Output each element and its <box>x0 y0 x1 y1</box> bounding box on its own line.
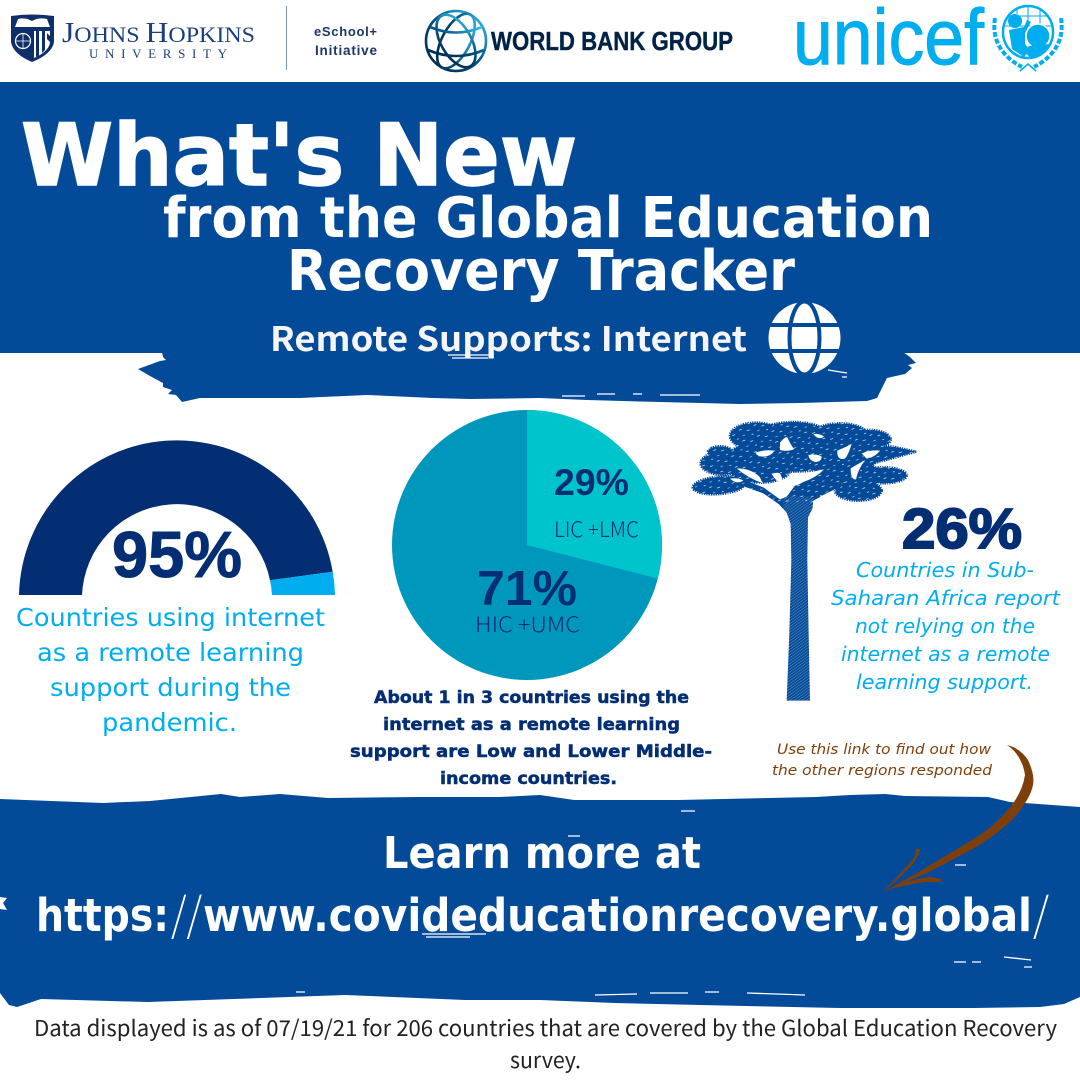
footnote <box>34 1011 1058 1075</box>
text: internet use: as a remote learning <box>37 638 304 667</box>
logo bar <box>11 0 1062 81</box>
footnote: Data displayed is as of 07/19/21 for 206 countries that are covered by the Global Education Recovery <box>34 1011 1058 1043</box>
illustration: acacia tree <box>690 420 920 702</box>
logo: Johns Hopkins shield <box>11 14 54 62</box>
logo: eSchool+ Initiative: Initiative <box>315 43 377 58</box>
pie label: 71%: 71% <box>477 562 577 616</box>
flake on left edge <box>0 897 7 910</box>
text: income note: income countries. <box>440 769 617 789</box>
logo: Johns Hopkins wordmark: UNIVERSITY <box>89 46 228 61</box>
divider <box>286 6 287 70</box>
stat: 95%: 95% <box>112 518 242 591</box>
pie label: 29%: LIC +LMC <box>554 514 639 544</box>
icon: globe <box>766 302 843 374</box>
link: website: // <box>171 879 202 945</box>
pie label: 29% <box>554 462 639 544</box>
footnote: survey. <box>510 1043 581 1075</box>
link: website: / <box>1033 879 1049 945</box>
text: internet use: pandemic. <box>102 708 237 737</box>
pie chart <box>392 410 662 680</box>
foliage gaps <box>730 434 880 512</box>
text: internet use <box>16 603 325 737</box>
text: Sub-Saharan Africa: learning support. <box>856 670 1033 694</box>
text: income note: support are Low and Lower Middle- <box>350 742 712 762</box>
text: income note: internet as a remote learning <box>383 715 680 735</box>
text: Sub-Saharan Africa: internet as a remote <box>841 642 1050 666</box>
brush highlights <box>448 355 847 396</box>
logo: eSchool+ Initiative <box>314 24 377 58</box>
logo: eSchool+ Initiative: eSchool+ <box>314 24 377 39</box>
text: internet use: Countries using internet <box>16 603 325 632</box>
text: Sub-Saharan Africa: Saharan Africa report <box>831 586 1061 610</box>
arrow <box>883 745 1033 892</box>
text: link callout <box>772 742 993 779</box>
foliage pads <box>692 422 916 501</box>
stat: 26%: 26% <box>902 497 1022 561</box>
logo: Johns Hopkins wordmark: JOHNS HOPKINS <box>62 17 255 49</box>
title: Recovery Tracker <box>287 239 795 304</box>
heading: learn more: Learn more at <box>383 828 701 879</box>
link: website <box>36 879 1049 945</box>
link: website: https: <box>36 889 169 942</box>
pie label: 71%: HIC +UMC <box>475 609 580 639</box>
header panel <box>0 82 1080 404</box>
title: What's New <box>21 106 577 206</box>
gauge chart <box>19 440 335 595</box>
title <box>21 106 933 304</box>
pie label: 29%: 29% <box>554 462 629 503</box>
logo: unicef emblem <box>994 6 1062 71</box>
text: Sub-Saharan Africa <box>831 558 1061 694</box>
pie label: 71% <box>475 562 580 639</box>
text: Sub-Saharan Africa: not relying on the <box>855 614 1035 638</box>
logo: World Bank globe <box>426 8 486 74</box>
title: from the Global Education <box>163 186 933 251</box>
footer band <box>0 794 1080 1008</box>
text: link callout: the other regions responded <box>772 763 993 779</box>
text: Sub-Saharan Africa: Countries in Sub- <box>856 558 1034 582</box>
trunk texture <box>783 497 813 702</box>
text: income note <box>350 688 712 789</box>
logo: World Bank wordmark: WORLD BANK GROUP <box>491 28 733 56</box>
brush stroke under header <box>138 352 916 404</box>
branches and trunk <box>740 463 853 701</box>
text: income note: About 1 in 3 countries using the <box>374 688 689 708</box>
foliage texture <box>690 420 920 503</box>
text: internet use: support during the <box>50 673 291 702</box>
subtitle: Remote Supports: Internet <box>270 312 747 361</box>
band highlights <box>296 811 1032 995</box>
text: link callout: Use this link to find out how <box>777 742 991 758</box>
